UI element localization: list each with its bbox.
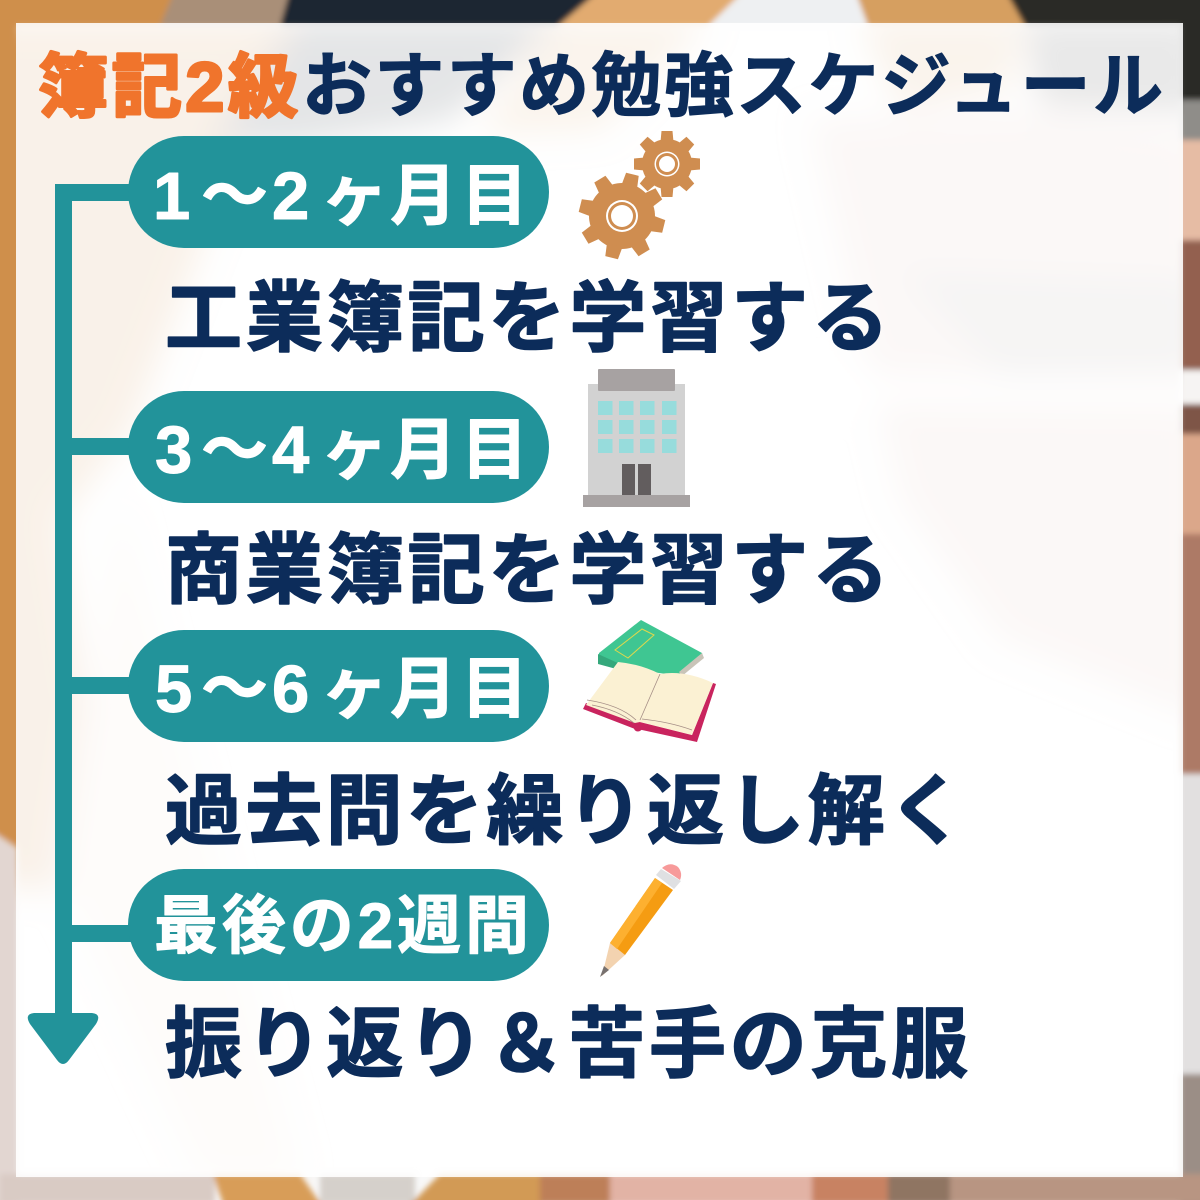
title: おすすめ勉強スケジュール <box>302 47 1163 125</box>
step 1 label pill: 1〜2ヶ月目 <box>153 159 528 234</box>
title: 簿記2級 <box>38 48 298 126</box>
step 3 label pill <box>128 630 549 742</box>
step 3 label pill: 5〜6ヶ月目 <box>155 652 528 727</box>
soft shapes under the panel <box>0 22 1184 898</box>
step 3 heading: 過去問を繰り返し解く <box>165 769 965 855</box>
step 1 label pill <box>128 136 549 248</box>
icon: books <box>583 620 716 742</box>
step 1 heading: 工業簿記を学習する <box>165 276 889 362</box>
step 2 label pill: 3〜4ヶ月目 <box>155 413 528 488</box>
icon: pencil <box>600 864 681 977</box>
step 4 label pill <box>128 869 549 981</box>
step 4 label pill: 最後の2週間 <box>154 890 529 962</box>
step 2 label pill <box>128 391 549 503</box>
timeline arrow with connectors <box>28 184 137 1064</box>
step 2 heading: 商業簿記を学習する <box>165 528 889 614</box>
icon: gears <box>570 131 700 268</box>
step 4 heading: 振り返り＆苦手の克服 <box>165 1002 968 1088</box>
icon: office building <box>583 369 690 507</box>
